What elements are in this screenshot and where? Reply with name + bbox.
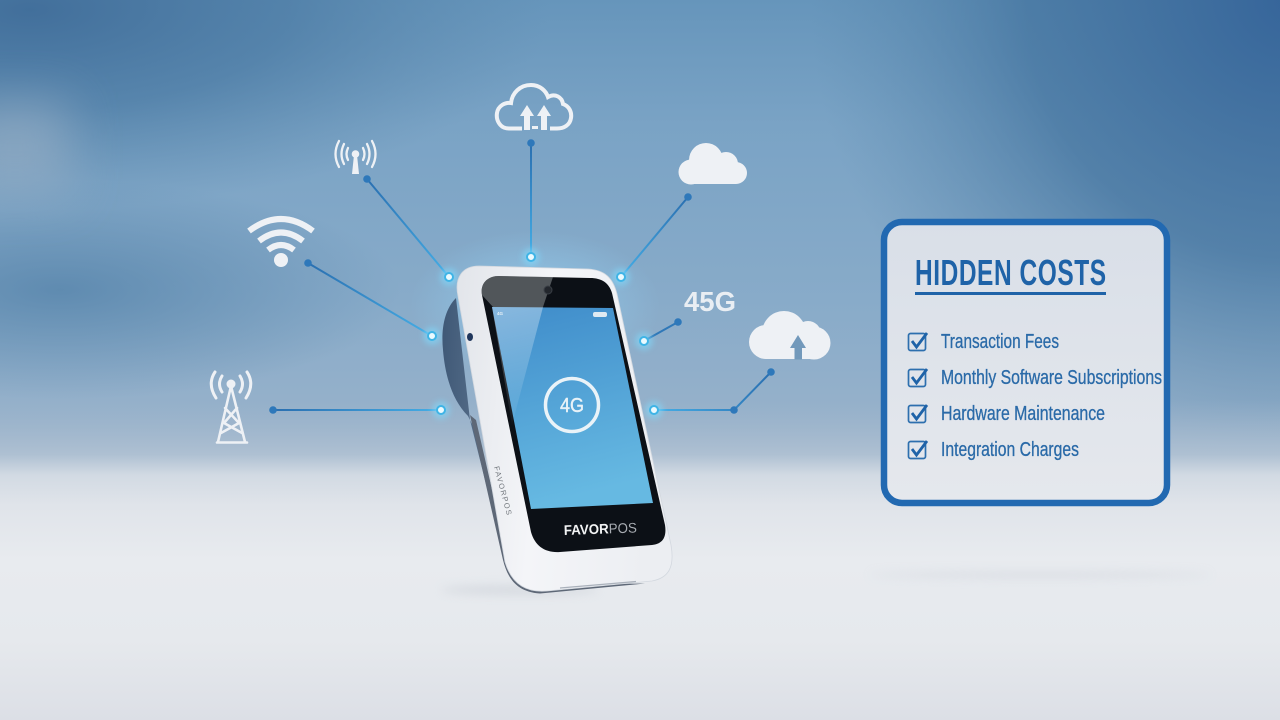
connector: 45G xyxy=(635,318,682,350)
connector: wifi xyxy=(304,259,441,345)
bottom slot xyxy=(560,582,636,588)
panel: hidden costs xyxy=(884,222,1167,503)
connector: solid cloud xyxy=(612,193,692,286)
item: integration charges xyxy=(908,439,1079,461)
icon: cloud with two upload arrows xyxy=(497,85,571,130)
icon: cell tower xyxy=(211,372,251,442)
status bar xyxy=(497,311,607,317)
item: monthly software subscriptions: Monthly Software Subscriptions xyxy=(941,367,1162,389)
device rim xyxy=(470,415,645,594)
icon: wifi xyxy=(249,219,313,267)
device bezel xyxy=(482,276,665,552)
icon: solid cloud xyxy=(678,143,747,184)
item: hardware maintenance xyxy=(908,403,1105,425)
item: transaction fees: Transaction Fees xyxy=(941,331,1059,353)
item: hardware maintenance: Hardware Maintenance xyxy=(941,403,1105,425)
connector: outline cloud xyxy=(522,139,540,266)
connector: cell tower xyxy=(269,401,450,419)
camera xyxy=(544,286,552,294)
item: integration charges: Integration Charges xyxy=(941,439,1079,461)
side brand: FAVORPOS xyxy=(492,465,514,516)
status bar: 4G xyxy=(497,311,504,316)
connector: upload cloud xyxy=(645,368,775,419)
glow behind device xyxy=(410,230,660,380)
connector lines xyxy=(269,139,775,419)
screen xyxy=(492,307,653,509)
device brand: FAVORPOS xyxy=(564,519,637,538)
label: 45G: 45G xyxy=(684,286,736,317)
device: FavorPOS terminal xyxy=(442,266,672,594)
device grip xyxy=(442,298,500,540)
item: transaction fees xyxy=(908,331,1059,353)
bezel gloss xyxy=(482,276,553,307)
side port xyxy=(467,333,473,341)
screen gloss xyxy=(492,307,543,425)
heading underline xyxy=(915,292,1106,295)
connector: antenna xyxy=(363,175,458,286)
icon: antenna xyxy=(336,141,376,174)
4G ring indicator xyxy=(546,378,598,432)
heading: HIDDEN COSTS xyxy=(915,252,1106,293)
device body xyxy=(457,266,672,591)
icon: cloud with upload arrow xyxy=(749,311,830,360)
4G ring indicator: 4G xyxy=(560,395,584,417)
